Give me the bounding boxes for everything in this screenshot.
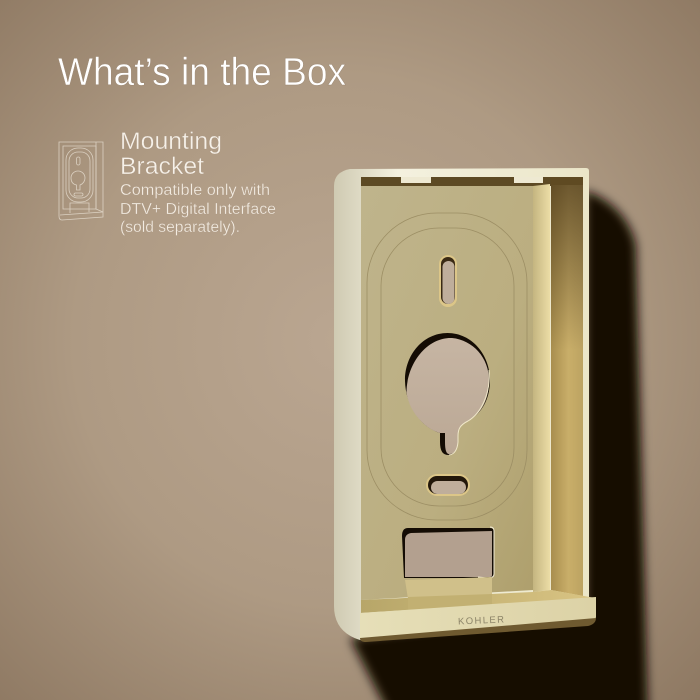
lip underside: [360, 618, 596, 642]
side wall top shading: [551, 184, 583, 350]
title: What’s in the Box: [58, 51, 346, 94]
side wall: [551, 184, 583, 596]
upper slot: [439, 255, 457, 307]
heading: mounting bracket: Mounting: [120, 128, 222, 155]
heading: mounting bracket: [120, 128, 222, 180]
KOHLER logo: KOHLER: [458, 614, 504, 627]
lower slot: [426, 474, 470, 496]
description text: (sold separately).: [120, 219, 240, 236]
folded tab: [405, 577, 492, 599]
description text: DTV+ Digital Interface: [120, 201, 276, 218]
bracket body: [334, 168, 589, 640]
top shade of side wall: [551, 177, 583, 185]
bracket shadow: [350, 190, 648, 700]
inner right wall: [533, 184, 550, 592]
description text: [120, 182, 276, 236]
mounting bracket product: [334, 168, 596, 642]
back panel: [361, 186, 533, 600]
rectangular cutout: [402, 527, 494, 578]
description text: Compatible only with: [120, 182, 270, 199]
embossed outlines: [367, 213, 527, 520]
tab lower: [408, 594, 492, 610]
top clips: [401, 177, 543, 183]
inner floor: [361, 590, 595, 613]
circular keyhole opening: [405, 333, 490, 455]
heading: mounting bracket: Bracket: [120, 153, 204, 180]
icon: mounting bracket outline: [59, 142, 103, 220]
top inner recess: [361, 177, 583, 186]
front lip: [360, 597, 596, 638]
